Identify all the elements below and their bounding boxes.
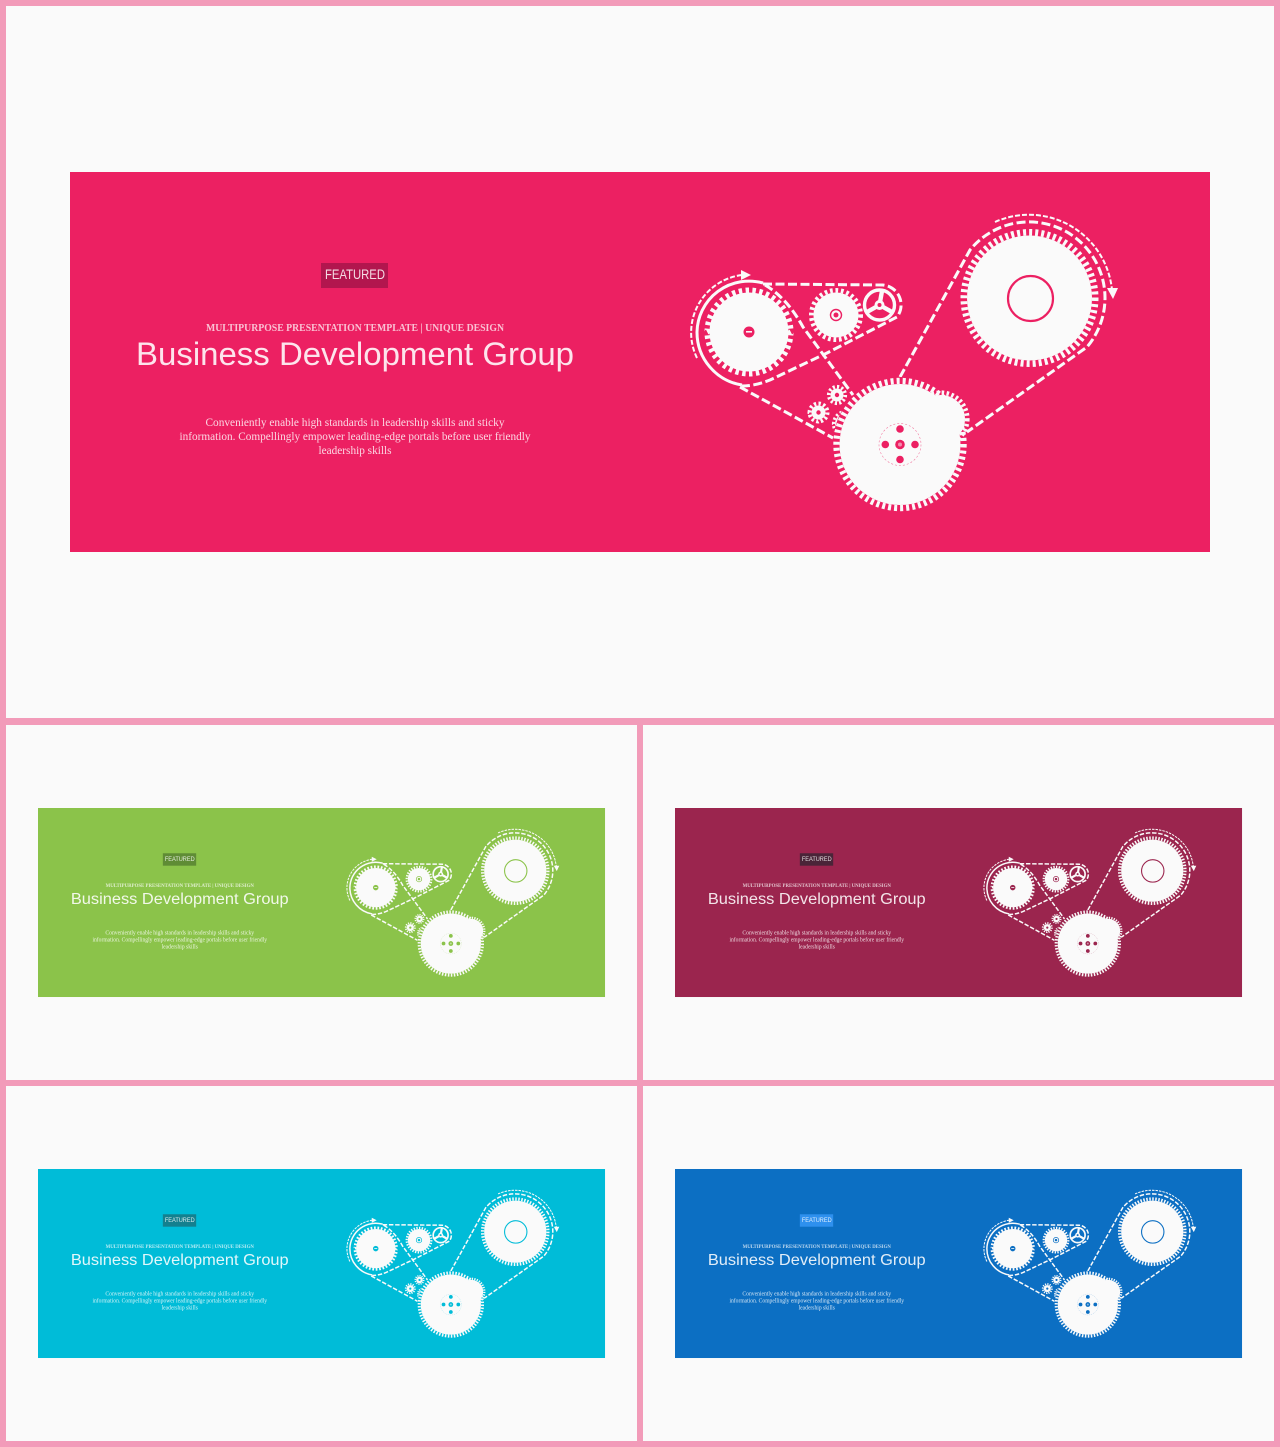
description text [729, 1291, 904, 1311]
panel: maroon banner [675, 808, 1242, 997]
gear and belt diagram [691, 215, 1118, 511]
arrow: left rotation [691, 270, 751, 358]
panel: blue banner [675, 1169, 1242, 1358]
description text [92, 1291, 267, 1311]
badge: featured [800, 1214, 833, 1227]
description text: information. Compellingly empower leading-edge portals before user friendly [92, 936, 267, 943]
description text: Conveniently enable high standards in leadership skills and sticky [206, 417, 505, 429]
gear: large top right [964, 232, 1095, 364]
panel: green banner [38, 808, 605, 997]
subtitle: MULTIPURPOSE PRESENTATION TEMPLATE | UNIQUE DESIGN [206, 323, 504, 334]
gear: middle small [811, 290, 861, 340]
description text: leadership skills [799, 944, 836, 950]
subtitle: MULTIPURPOSE PRESENTATION TEMPLATE | UNIQUE DESIGN [106, 883, 254, 889]
badge: featured: FEATURED [802, 856, 832, 863]
wheel: three-spoke pulley [864, 290, 894, 320]
description text: Conveniently enable high standards in leadership skills and sticky [105, 1291, 254, 1297]
badge: featured [163, 853, 196, 866]
badge: featured: FEATURED [325, 267, 385, 282]
description text: information. Compellingly empower leading-edge portals before user friendly [729, 936, 904, 943]
badge: featured: FEATURED [165, 856, 195, 863]
subtitle: MULTIPURPOSE PRESENTATION TEMPLATE | UNIQUE DESIGN [106, 1244, 254, 1250]
gear and belt diagram [984, 1190, 1196, 1338]
title: Business Development Group [71, 1252, 289, 1269]
badge: featured: FEATURED [165, 1217, 195, 1224]
description text: information. Compellingly empower leading-edge portals before user friendly [92, 1297, 267, 1304]
belts [697, 222, 1105, 438]
description text: information. Compellingly empower leading-edge portals before user friendly [180, 431, 531, 443]
badge: featured [321, 263, 388, 288]
arrow: right rotation [995, 215, 1118, 299]
title: Business Development Group [136, 336, 574, 372]
gear and belt diagram [347, 829, 559, 977]
title: Business Development Group [71, 891, 289, 908]
badge: featured [163, 1214, 196, 1227]
description text: leadership skills [318, 445, 392, 457]
title: Business Development Group [708, 891, 926, 908]
description text: Conveniently enable high standards in leadership skills and sticky [742, 930, 891, 936]
description text [180, 417, 531, 457]
description text: leadership skills [162, 1305, 199, 1311]
subtitle: MULTIPURPOSE PRESENTATION TEMPLATE | UNIQUE DESIGN [743, 1244, 891, 1250]
description text [92, 930, 267, 950]
description text: leadership skills [162, 944, 199, 950]
gear: bottom drive with attached gears [833, 377, 967, 511]
description text [729, 930, 904, 950]
subtitle: MULTIPURPOSE PRESENTATION TEMPLATE | UNIQUE DESIGN [743, 883, 891, 889]
description text: information. Compellingly empower leading-edge portals before user friendly [729, 1297, 904, 1304]
panel: cyan banner [38, 1169, 605, 1358]
description text: Conveniently enable high standards in leadership skills and sticky [742, 1291, 891, 1297]
description text: Conveniently enable high standards in leadership skills and sticky [105, 930, 254, 936]
badge: featured: FEATURED [802, 1217, 832, 1224]
description text: leadership skills [799, 1305, 836, 1311]
title: Business Development Group [708, 1252, 926, 1269]
gear and belt diagram [347, 1190, 559, 1338]
gear: left large [707, 290, 791, 374]
gear and belt diagram [984, 829, 1196, 977]
gears: small pair [810, 387, 845, 422]
panel: main pink banner [70, 172, 1210, 552]
badge: featured [800, 853, 833, 866]
